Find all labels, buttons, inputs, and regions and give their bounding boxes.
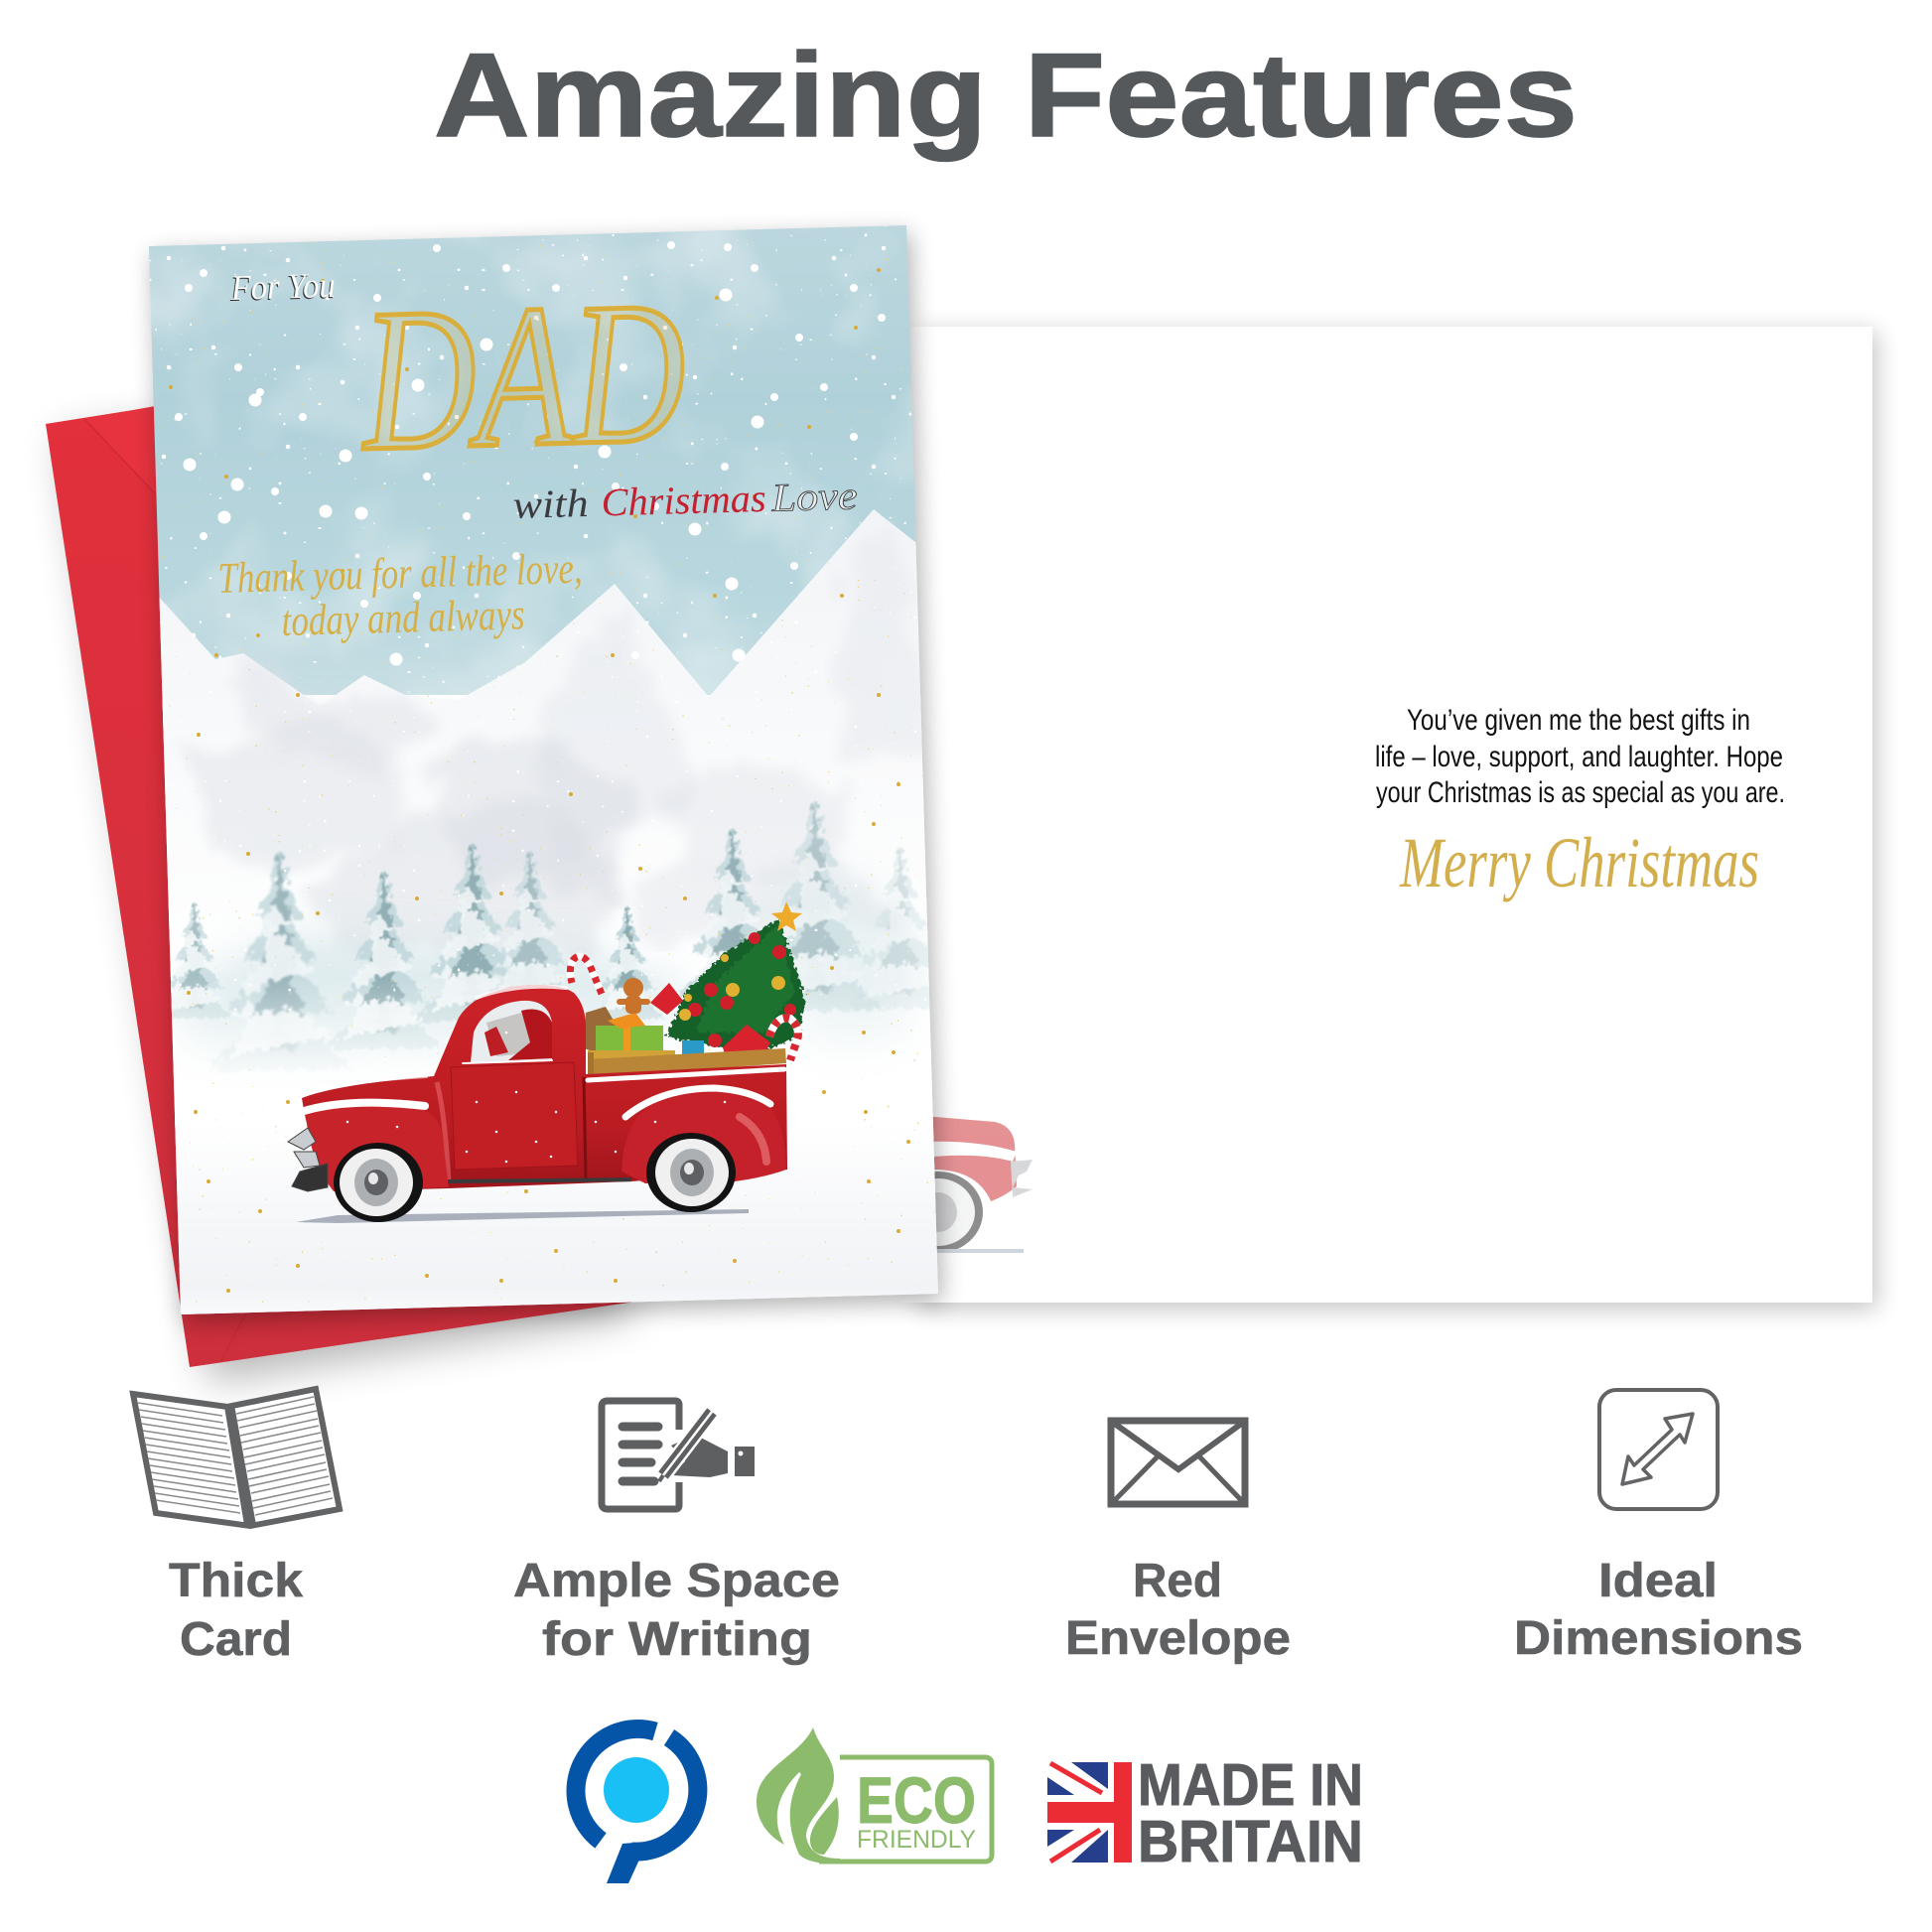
inside verse: your Christmas is as special as you are. [1376,776,1785,809]
snow speckle [139,218,953,1013]
front fender [306,1100,449,1191]
rear fender [621,1108,786,1183]
label: ideal dimensions: Dimensions [1514,1612,1803,1665]
mountains [139,509,953,993]
front wheel [334,1143,423,1222]
label: thick card: Card [180,1613,292,1666]
gold flecks [171,270,908,1291]
card text: with christmas love: Love [770,473,858,520]
label: ample space: Ample Space [513,1555,840,1607]
running board [448,1177,631,1183]
icon: union flag [1047,1762,1132,1863]
feature: thick card [133,1389,340,1666]
card text: with christmas love: with [512,481,589,527]
inside verse: life – love, support, and laughter. Hope [1375,741,1783,773]
card text: today and always: today and always [281,590,525,645]
inside verse [1375,704,1785,809]
card text: with christmas love: Christmas [601,476,766,525]
snowy ground [175,1122,938,1314]
eco wordmark: ECO [857,1763,976,1837]
sky [139,218,953,735]
made in text: MADE IN [1138,1752,1363,1818]
cargo: gingerbread man [617,978,650,1014]
cargo: wooden rail [594,1048,786,1074]
icon: diagonal double arrow [1599,1390,1718,1509]
label: ample space: for Writing [542,1613,812,1666]
windshield and cab window [471,1001,552,1062]
feature: red envelope [1065,1421,1291,1665]
feature: ample space [513,1401,840,1666]
front bumper [288,1128,328,1191]
card text: dad: DAD [357,259,688,493]
large snow flakes [164,245,894,659]
icon: leaf [757,1727,840,1863]
label: ideal dimensions [1514,1555,1803,1665]
title: Amazing Features [434,29,1578,162]
gold speckle [139,218,953,1320]
britain text: BRITAIN [1138,1809,1363,1874]
cab door [451,1062,578,1170]
badge: blue ring logo [576,1728,698,1883]
label: ample space [513,1555,840,1666]
specks on truck [347,1033,725,1162]
forest of fir trees [139,798,954,1127]
label: ideal dimensions: Ideal [1598,1555,1718,1607]
truck shadow [296,1209,749,1223]
card text: with christmas love [512,473,858,527]
inside verse: You’ve given me the best gifts in [1407,704,1750,737]
card text: thank you: Thank you for all the love, [217,544,583,603]
card text: for you: For You [229,265,336,308]
cargo: candy canes [570,956,602,994]
badge: eco friendly [757,1727,992,1863]
icon: writing on document [602,1401,755,1509]
cargo: christmas tree [666,901,805,1052]
label: red envelope: Envelope [1065,1612,1291,1665]
cargo: gifts [650,983,683,1015]
driver santa [484,1009,552,1060]
panel: card front [139,218,954,1330]
badge: made in britain [1047,1752,1363,1874]
truck [288,901,805,1223]
panel: red envelope [46,406,635,1382]
label: thick card: Thick [169,1555,303,1607]
label: red envelope [1065,1555,1291,1665]
icon: envelope [1111,1421,1245,1504]
label: red envelope: Red [1133,1555,1222,1607]
icon: folded card [133,1389,340,1526]
truck body [302,985,787,1191]
label: thick card [169,1555,303,1666]
snow on truck [301,987,784,1117]
ghost truck printed on inside page [894,1116,1033,1253]
rear wheel [646,1133,736,1212]
panel: open card inside page [894,327,1877,1310]
feature: ideal dimensions [1514,1390,1803,1665]
lower white base [139,695,953,1330]
friendly wordmark: FRIENDLY [857,1826,976,1854]
inside greeting: Merry Christmas [1399,823,1759,902]
